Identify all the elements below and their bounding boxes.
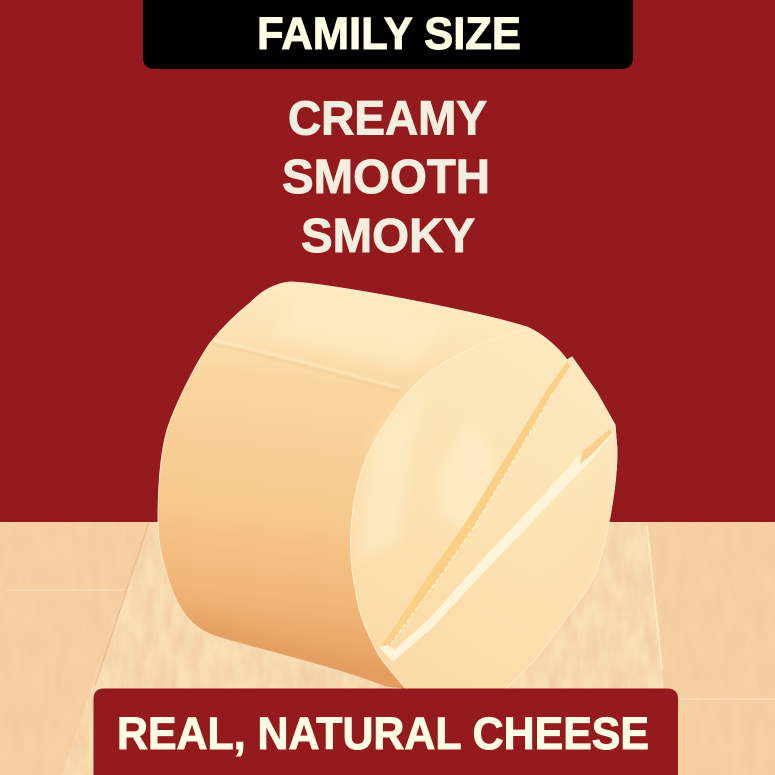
wooden board [0, 522, 775, 775]
text block: flavour descriptors: SMOOTH [282, 150, 490, 204]
icon: smoked cheese wheel [158, 282, 617, 700]
heading: family size: FAMILY SIZE [257, 8, 521, 59]
panel: family size banner [143, 0, 633, 69]
first slot [381, 362, 570, 648]
panel: real natural cheese banner [94, 688, 678, 775]
text block: flavour descriptors [282, 92, 490, 263]
text block: flavour descriptors: SMOKY [301, 209, 475, 263]
rind crease [190, 295, 450, 700]
cheese rind body [158, 282, 617, 689]
background: red wall [0, 0, 775, 523]
cut face [351, 330, 617, 689]
caption: real natural cheese: REAL, NATURAL CHEESE [117, 708, 649, 759]
face highlights [362, 400, 610, 640]
text block: flavour descriptors: CREAMY [288, 92, 487, 146]
second slot [388, 429, 614, 661]
